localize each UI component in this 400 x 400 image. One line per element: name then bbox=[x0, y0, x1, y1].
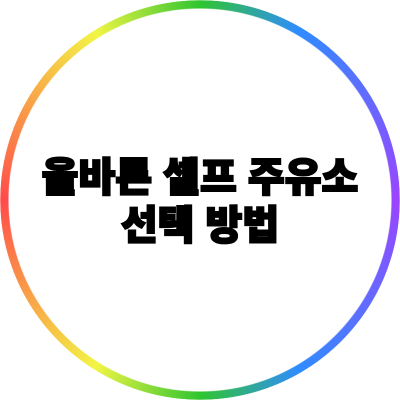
title: 올바른 셀프 주유소 bbox=[42, 156, 358, 200]
title: 선택 방법 bbox=[121, 204, 279, 248]
title bbox=[42, 156, 358, 248]
